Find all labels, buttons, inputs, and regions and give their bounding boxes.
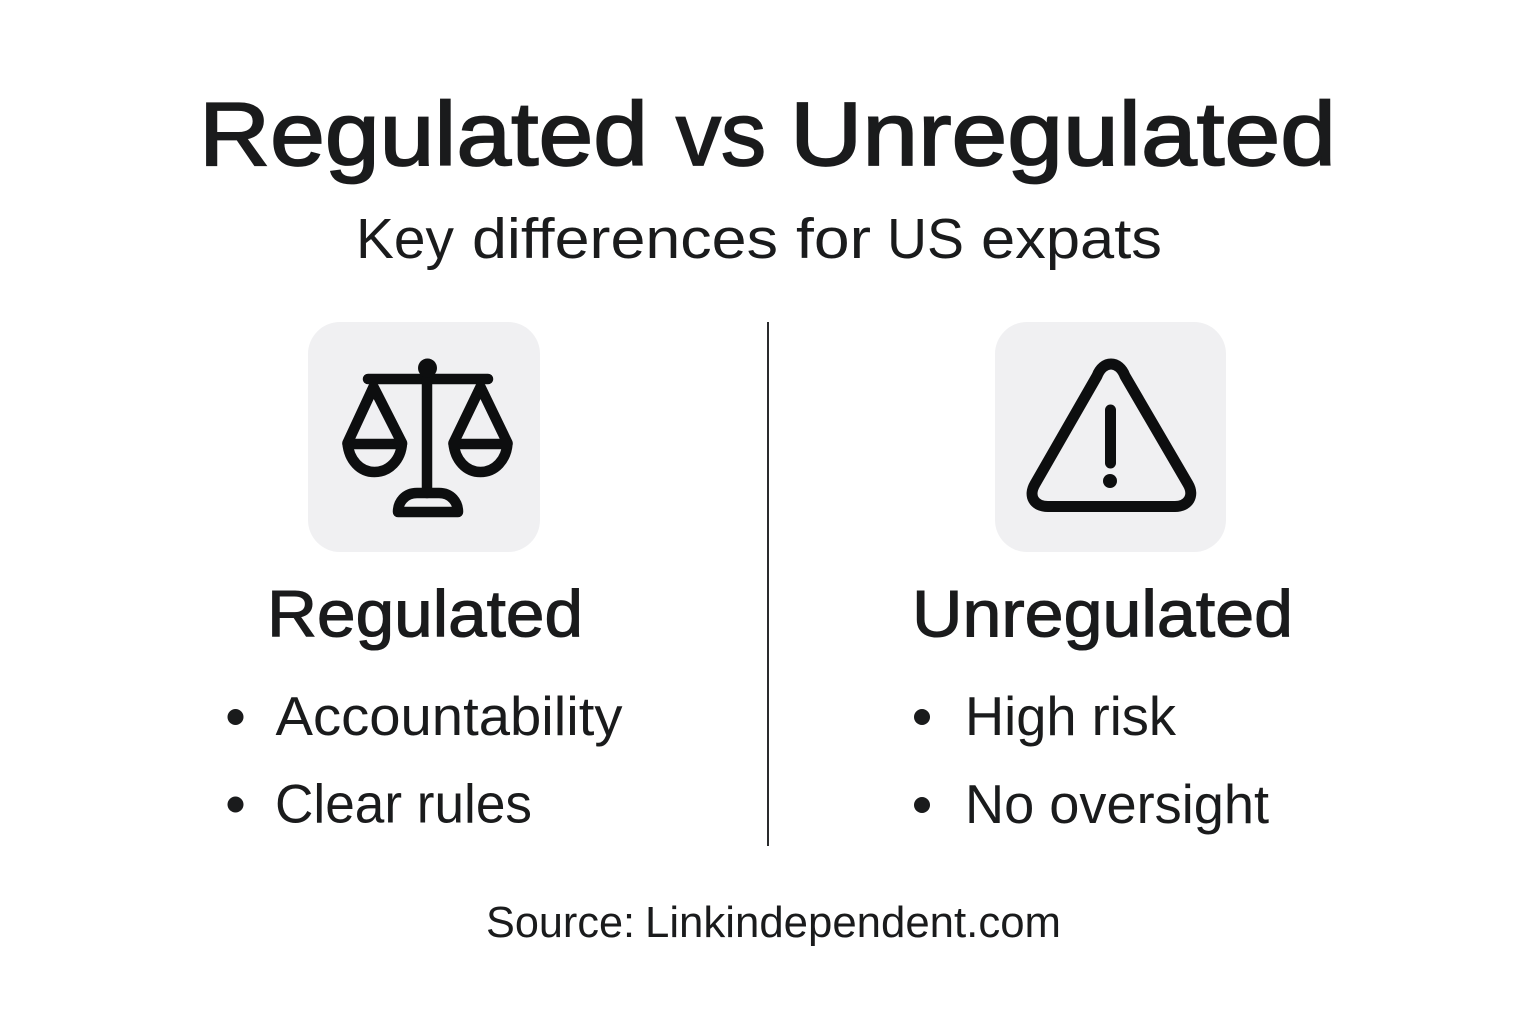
icon: warning triangle	[995, 322, 1226, 552]
source note: Linkindependent.com	[645, 898, 1061, 947]
list: unregulated points	[914, 686, 1269, 835]
subtitle: differences	[472, 207, 778, 271]
subtitle: expats	[981, 207, 1162, 271]
list: regulated points: Clear rules	[275, 774, 532, 834]
title: Regulated	[199, 85, 648, 185]
title: vs	[676, 85, 766, 185]
center divider	[767, 322, 769, 846]
panel: unregulated	[912, 322, 1293, 835]
subtitle: US	[887, 207, 964, 271]
title: Unregulated	[790, 85, 1336, 185]
heading: unregulated: Unregulated	[912, 578, 1293, 650]
subtitle	[356, 207, 1162, 271]
source note: Source:	[486, 898, 635, 947]
list: regulated points	[228, 686, 623, 834]
list: regulated points: Accountability	[276, 686, 623, 747]
list: unregulated points: No oversight	[965, 774, 1269, 835]
panel: regulated	[228, 322, 623, 834]
icon: balance scale	[308, 322, 540, 552]
heading: regulated: Regulated	[267, 578, 583, 650]
list: unregulated points: High risk	[965, 686, 1177, 747]
subtitle: for	[796, 207, 871, 271]
subtitle: Key	[356, 207, 454, 271]
title	[199, 85, 1336, 185]
